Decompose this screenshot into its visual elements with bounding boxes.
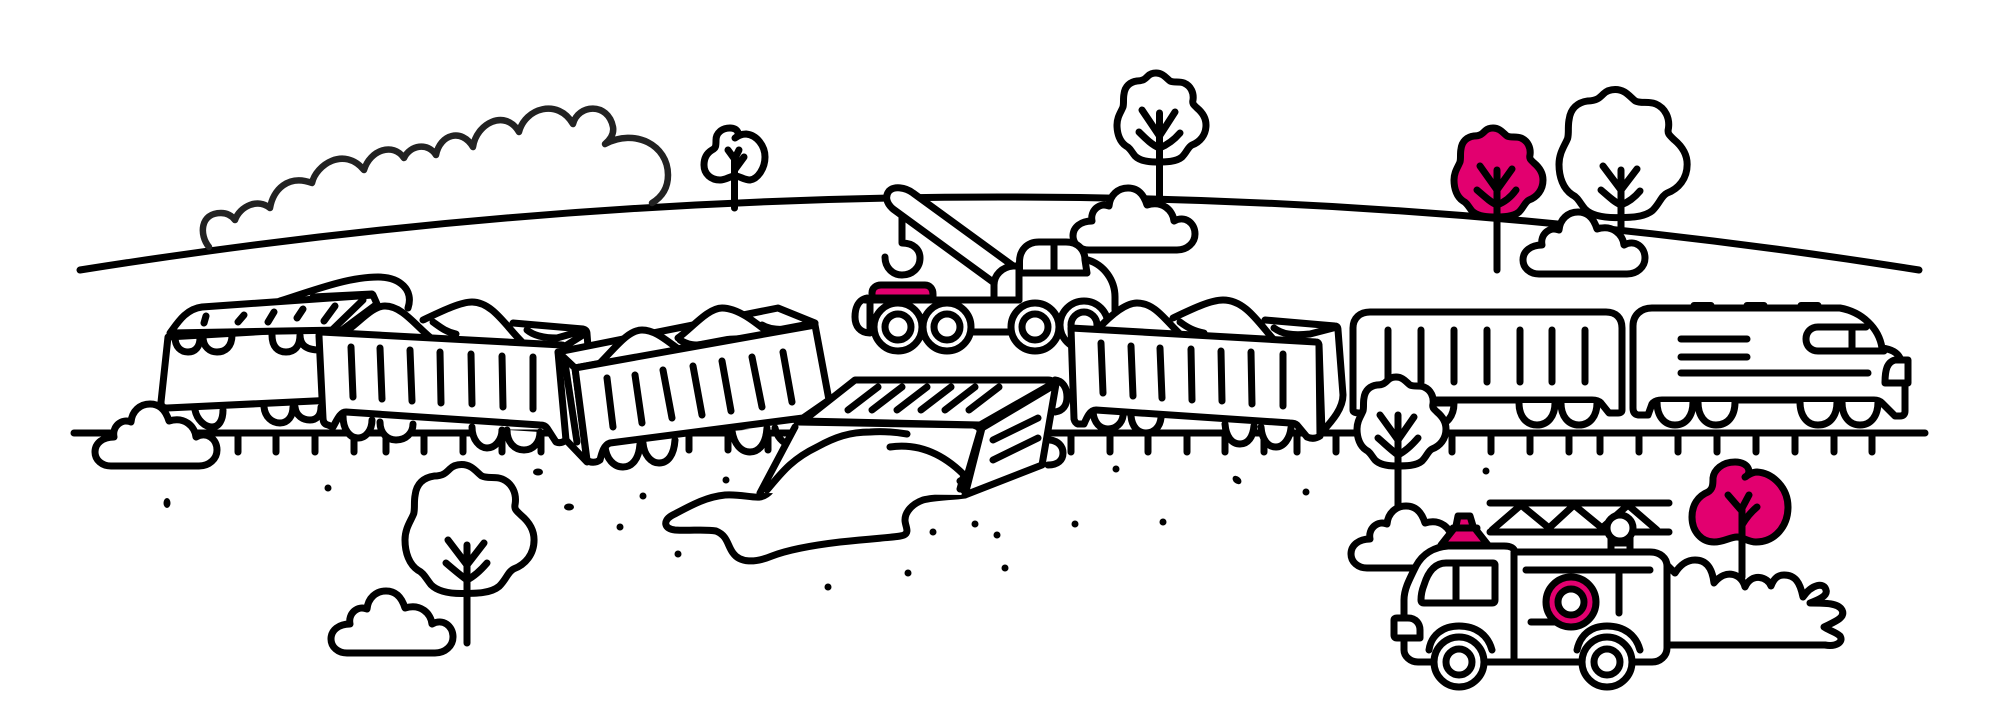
wagon slats (1101, 343, 1283, 406)
railway track with sleepers (74, 433, 1925, 452)
wagon body (1071, 328, 1320, 438)
wagon side face (1265, 320, 1343, 432)
wagon side slats (993, 418, 1038, 460)
bush behind fire engine (1351, 506, 1473, 568)
wagon side face (965, 384, 1056, 495)
wheels behind overturned wagon (1048, 380, 1067, 465)
crane front bumper (855, 298, 870, 333)
truck headlight (1394, 618, 1420, 638)
spilled cargo puddle (666, 490, 965, 561)
tree, lower left (405, 464, 534, 643)
crane pink tool box (872, 285, 933, 298)
wagon wheels (605, 428, 790, 467)
tree on hill, centre (1117, 73, 1206, 196)
cab divider (1510, 552, 1518, 662)
coal load (344, 302, 586, 345)
cab window (1421, 563, 1495, 603)
crane chassis (865, 300, 1036, 332)
bush on hill, right (1523, 212, 1645, 274)
crane hook (885, 217, 920, 275)
overturned wagon (760, 380, 1056, 495)
engine roof windows (204, 306, 335, 323)
beacon post (1611, 532, 1630, 552)
crane cab lower section (994, 266, 1019, 300)
wagon wheels (1435, 403, 1597, 425)
wagon back face (513, 323, 588, 347)
loco windscreen (1806, 327, 1884, 351)
loco roof vents (1694, 302, 1818, 309)
coal wagon, derailed left (319, 302, 588, 450)
crane boom (887, 188, 1016, 282)
coal wagon, tilted centre (558, 308, 829, 467)
large white tree on hill (1559, 89, 1687, 230)
engine lower wheels (195, 407, 321, 427)
pink siren (1441, 516, 1488, 545)
tree in front of container wagon (1357, 377, 1446, 510)
engine exhaust cowl (280, 277, 409, 308)
loco wheels (1657, 402, 1878, 425)
debris dots (164, 466, 1490, 590)
fire engine (1394, 503, 1669, 687)
smoke plume (203, 109, 668, 247)
fire engine wheels (1434, 637, 1632, 687)
container wagon, on rails (1353, 312, 1622, 425)
locomotive, on rails (1633, 306, 1908, 425)
coal wagon, derailed right (1071, 300, 1343, 447)
wagon wheels (343, 416, 540, 450)
bush, lower left (331, 591, 453, 653)
wagon slats (607, 352, 792, 427)
wheel arches (1429, 626, 1640, 650)
bush on track, left (95, 404, 217, 466)
long bush right of fire engine (1665, 560, 1843, 645)
wagon top face (803, 380, 1052, 425)
pink tree behind fire engine (1692, 462, 1788, 577)
wagon wheels (1093, 412, 1291, 447)
hill horizon line (80, 197, 1919, 270)
small tree on hill (704, 128, 765, 208)
wagon end face (558, 352, 587, 462)
engine upper wheels (175, 335, 320, 352)
wagon body (575, 325, 829, 462)
crane cab (1020, 242, 1087, 273)
wagon body (319, 332, 566, 443)
wagon underside fill (760, 423, 982, 495)
wagon underside arcs (760, 427, 968, 493)
coal load (600, 308, 790, 363)
loco headlight (1885, 360, 1908, 383)
crane wheels (874, 301, 1108, 351)
derailed locomotive, far left (161, 277, 409, 427)
ladder (1490, 503, 1669, 532)
wagon slats (1388, 330, 1585, 382)
coal load (1097, 300, 1337, 340)
wagon top slats (848, 387, 999, 410)
truck body (1404, 546, 1667, 662)
hose reel, body lines (1526, 570, 1650, 622)
pink tree on hill (1454, 128, 1543, 270)
beacon light (1607, 515, 1633, 541)
engine roof (170, 295, 377, 333)
crane truck (855, 188, 1115, 351)
bush on hill, centre (1073, 188, 1195, 250)
loco grille lines (1681, 339, 1868, 373)
wagon back box (558, 308, 815, 368)
wagon slats (351, 347, 533, 409)
engine body (161, 327, 340, 408)
crane hood (1088, 260, 1115, 310)
